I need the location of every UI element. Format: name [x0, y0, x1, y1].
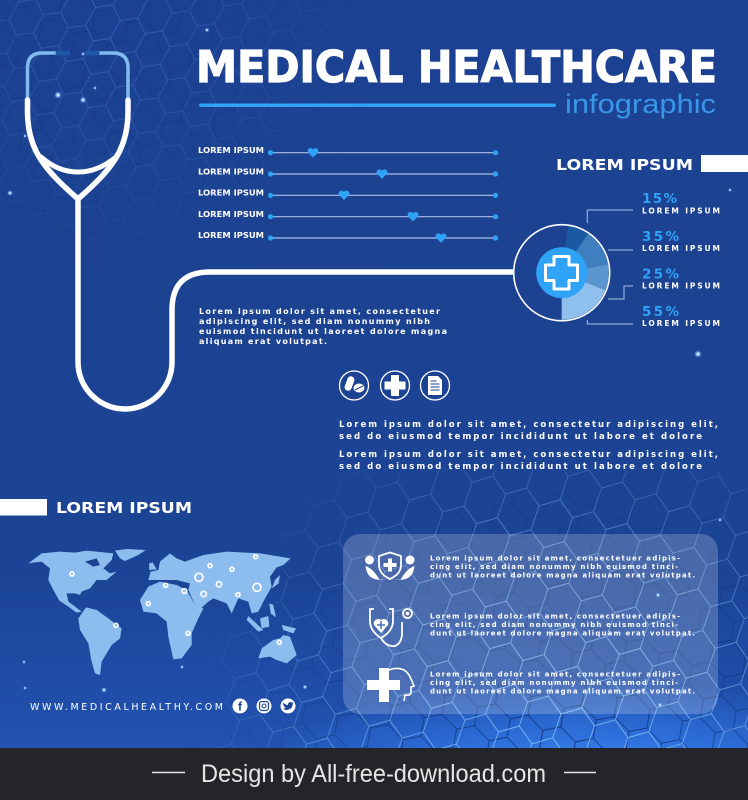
slider 1: LOREM IPSUM [198, 146, 264, 155]
social icons [232, 698, 296, 714]
footer text: Design by All-free-download.com [201, 760, 546, 788]
icon: cross with head [367, 668, 414, 702]
paragraph: left: adipiscing elit, sed diam nonummy nibh [199, 317, 430, 326]
stethoscope graphic [28, 53, 515, 409]
heading: left: LOREM IPSUM [56, 499, 192, 517]
website url: WWW.MEDICALHEALTHY.COM [30, 702, 223, 713]
paragraph: center: Lorem ipsum dolor sit amet, consectetur adipiscing elit, [339, 450, 718, 460]
chart labels: 25% [642, 266, 679, 282]
paragraph: center [339, 420, 718, 472]
heading: left [0, 499, 192, 517]
icon: twitter [280, 698, 296, 714]
paragraph: left: aliquam erat volutpat. [199, 337, 327, 346]
icon: document [420, 371, 450, 400]
service 2: Lorem ipsum dolor sit amet, consectetuer adipis- [430, 612, 680, 620]
chart labels: 35% [642, 229, 679, 245]
chart labels: LOREM IPSUM [642, 282, 720, 290]
map markers [70, 555, 281, 644]
icon row [340, 371, 450, 400]
chart leaders [587, 210, 633, 324]
slider 5 [198, 231, 498, 243]
chart labels: LOREM IPSUM [642, 206, 720, 216]
service 3: Lorem ipsum dolor sit amet, consectetuer adipis- [430, 670, 680, 678]
icon: stethoscope with heart [370, 609, 412, 646]
title underline [199, 104, 556, 107]
paragraph: left: euismod tincidunt ut laoreet dolore magna [199, 327, 447, 336]
icon: facebook: f [238, 700, 243, 714]
service 1 [365, 552, 695, 580]
slider 3 [198, 188, 498, 200]
service 2 [370, 609, 695, 646]
chart labels: 55% [642, 304, 679, 320]
paragraph: center: Lorem ipsum dolor sit amet, consectetur adipiscing elit, [339, 420, 718, 430]
chart labels: LOREM IPSUM [642, 244, 720, 253]
slider list [198, 146, 498, 243]
service 3: cing elit, sed diam nonummy nibh euismod tinci- [430, 679, 678, 687]
world map [28, 549, 297, 675]
slider 4 [198, 210, 498, 221]
paragraph: left: Lorem ipsum dolor sit amet, consectetuer [199, 307, 440, 316]
heading: right: LOREM IPSUM [556, 156, 693, 174]
icon: plus [380, 371, 410, 400]
slider 1 [198, 146, 498, 158]
heading: right [556, 155, 748, 174]
slider 2 [198, 168, 498, 179]
panel: services [343, 534, 718, 714]
icon: shield with people [365, 552, 414, 580]
slider 5: LOREM IPSUM [198, 231, 264, 240]
service 3: dunt ut laoreet dolore magna aliquam erat volutpat. [430, 688, 695, 696]
icon: medical cross [536, 247, 587, 298]
slider 4: LOREM IPSUM [198, 210, 264, 219]
footer band [0, 748, 748, 800]
continents [28, 549, 297, 675]
service 3 [367, 668, 695, 702]
donut chart [514, 225, 610, 321]
paragraph: left [199, 307, 447, 346]
chart labels: 15% [642, 191, 677, 207]
service 1: dunt ut laoreet dolore magna aliquam erat volutpat. [430, 572, 695, 580]
icon: instagram [256, 698, 272, 714]
title: MEDICAL HEALTHCARE [196, 42, 717, 93]
icon: pills [340, 371, 368, 400]
service 2: cing elit, sed diam nonummy nibh euismod tinci- [430, 621, 678, 629]
chart labels [642, 191, 720, 328]
paragraph: center: sed do eiusmod tempor incididunt ut labore et dolore [339, 462, 702, 472]
chart labels: LOREM IPSUM [642, 319, 720, 328]
service 2: dunt ut laoreet dolore magna aliquam erat volutpat. [430, 630, 695, 638]
slider 2: LOREM IPSUM [198, 168, 264, 176]
paragraph: center: sed do eiusmod tempor incididunt ut labore et dolore [339, 432, 702, 442]
slider 3: LOREM IPSUM [198, 188, 264, 198]
service 1: cing elit, sed diam nonummy nibh euismod tinci- [430, 563, 678, 571]
subtitle: infographic [565, 89, 716, 119]
service 1: Lorem ipsum dolor sit amet, consectetuer adipis- [430, 554, 680, 562]
